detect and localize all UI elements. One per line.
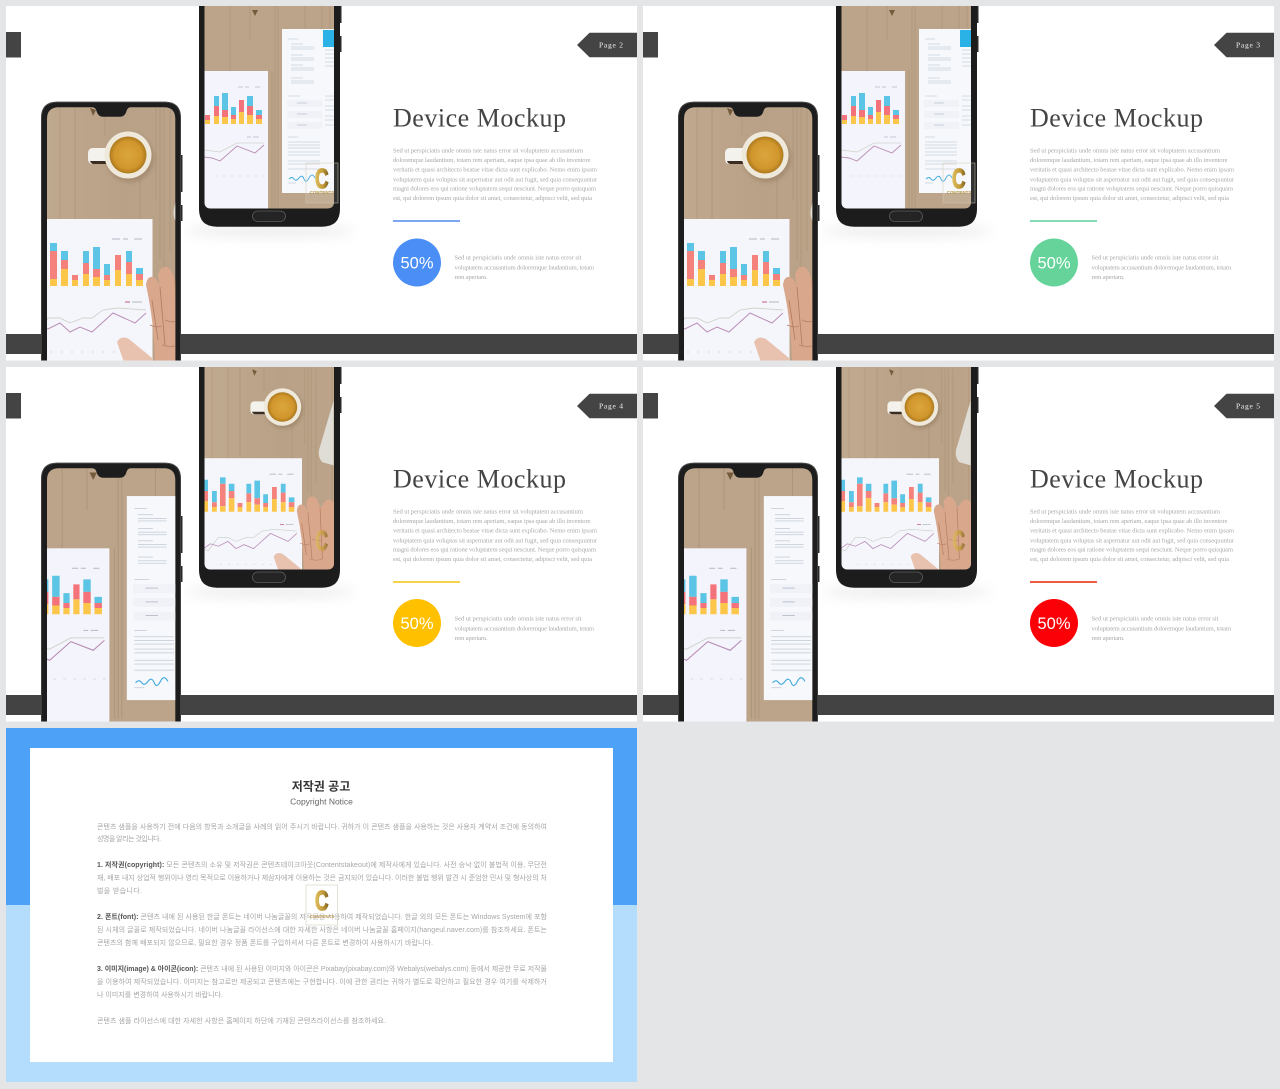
bottom dark bar bbox=[6, 334, 637, 354]
body text: Sed ut perspiciatis unde omnis iste natus error sit voluptatem accusantium bbox=[1030, 147, 1221, 154]
caption text: voluptatem accusantium doloremque laudantium, totam bbox=[454, 264, 595, 271]
page tag: Page 4 bbox=[599, 402, 623, 410]
phone mockup: front, coffee and chart bbox=[678, 102, 820, 360]
body text: magni dolores eos qui ratione voluptatem sequi nesciunt. Neque porro quisquam bbox=[393, 186, 597, 193]
notice subtitle: Copyright Notice bbox=[290, 796, 353, 806]
white notice card bbox=[30, 748, 613, 1062]
watermark bbox=[306, 885, 338, 925]
left dark tab bbox=[6, 32, 21, 58]
body text bbox=[1030, 508, 1235, 563]
blue background top bbox=[6, 728, 637, 905]
intro paragraph: 콘텐츠 샘플을 사용하기 전에 다음의 항목과 소개글을 사례의 읽어 주시기 바랍니다. 귀하가 이 콘텐츠 샘플을 사용하는 것은 사용자 계약서 조건에 동의하여 bbox=[97, 822, 547, 831]
panel: slide page 5 (red) bbox=[637, 355, 1274, 740]
body text: magni dolores eos qui ratione voluptatem sequi nesciunt. Neque porro quisquam bbox=[1030, 186, 1234, 193]
watermark: C bbox=[952, 164, 966, 194]
body text: veritatis et quasi architecto beatae vitae dicta sunt explicabo. Nemo enim ipsam bbox=[393, 528, 598, 535]
phone mockup: front, résumé and chart bbox=[41, 462, 182, 722]
bottom dark bar bbox=[6, 695, 637, 715]
closing line: 콘텐츠 샘플 라이선스에 대한 자세한 사항은 홈페이지 하단에 기재된 콘텐츠라이선스를 참조하세요. bbox=[97, 1016, 386, 1025]
caption text: Sed ut perspiciatis unde omnis iste natus error sit bbox=[1092, 615, 1219, 622]
percent badge: 50% bbox=[1037, 615, 1071, 633]
intro paragraph: 성명을 알리는 것입니다. bbox=[97, 834, 161, 843]
body text: doloremque laudantium, totam rem aperiam, eaque ipsa quae ab illo inventore bbox=[1030, 157, 1228, 164]
watermark: CONTENTS bbox=[310, 190, 334, 195]
body text: magni dolores eos qui ratione voluptatem sequi nesciunt. Neque porro quisquam bbox=[1030, 547, 1234, 554]
caption text: rem aperiam. bbox=[454, 274, 488, 281]
body text: doloremque laudantium, totam rem aperiam, eaque ipsa quae ab illo inventore bbox=[393, 157, 591, 164]
percent badge: 50% bbox=[400, 615, 434, 633]
section 1: copyright: 재, 배포 내지 상업적 행위이나 영리 목적으로 이용하거나 제삼자에게 이용하는 것은 금지되어 있습니다. 이러한 불법 행위 발견 시 준엄한 민사 및 형사상의 처 bbox=[97, 873, 547, 882]
caption text bbox=[454, 254, 595, 281]
watermark: C bbox=[316, 525, 328, 556]
page tag bbox=[577, 33, 637, 57]
percent badge bbox=[393, 238, 441, 286]
heading: Device Mockup bbox=[393, 464, 566, 494]
slide background bbox=[6, 367, 637, 722]
section 3: image and icon: 을 이용하여 제작되었습니다. 이미지는 참고로만 제공되고 콘텐츠에는 구현합니다. 이에 관한 권리는 귀하가 별도로 확인하고 필요한 경우 여기를 삭제하거 bbox=[97, 977, 547, 986]
body text: doloremque laudantium, totam rem aperiam, eaque ipsa quae ab illo inventore bbox=[1030, 518, 1228, 525]
body text: voluptatem quia voluptas sit aspernatur aut odit aut fugit, sed quia consequuntur bbox=[1030, 537, 1235, 544]
light blue background bottom bbox=[6, 905, 637, 1082]
bottom dark bar bbox=[643, 695, 1274, 715]
body text: doloremque laudantium, totam rem aperiam, eaque ipsa quae ab illo inventore bbox=[393, 518, 591, 525]
panel: slide page 3 (green) bbox=[643, 6, 1274, 360]
percent badge bbox=[1030, 599, 1078, 647]
body text: voluptatem quia voluptas sit aspernatur aut odit aut fugit, sed quia consequuntur bbox=[1030, 176, 1235, 183]
section 3: image and icon: 나 이미지를 변경하여 사용하시기 바랍니다. bbox=[97, 990, 223, 999]
caption text: Sed ut perspiciatis unde omnis iste natus error sit bbox=[454, 254, 582, 261]
body text: veritatis et quasi architecto beatae vitae dicta sunt explicabo. Nemo enim ipsam bbox=[1030, 167, 1235, 174]
intro paragraph bbox=[97, 822, 547, 843]
body text: veritatis et quasi architecto beatae vitae dicta sunt explicabo. Nemo enim ipsam bbox=[1030, 528, 1235, 535]
caption text: voluptatem accusantium doloremque laudantium, totam bbox=[1092, 625, 1232, 632]
section 1: copyright: 벌을 받습니다. bbox=[97, 886, 142, 895]
percent badge bbox=[393, 599, 441, 647]
body text: est, qui dolorem ipsum quia dolor sit amet, consectetur, adipisci velit, sed quia bbox=[393, 195, 592, 202]
watermark bbox=[306, 163, 338, 203]
page tag: Page 3 bbox=[1236, 40, 1260, 50]
bottom dark bar bbox=[643, 334, 1274, 354]
body text: Sed ut perspiciatis unde omnis iste natus error sit voluptatem accusantium bbox=[1030, 508, 1221, 515]
section 1: copyright: 1. 저작권(copyright): 모든 콘텐츠의 소유 및 저작권은 콘텐츠테이크아웃(Contentstakeout)에 제작사에게 있습니다. 사전 승낙 없이 불법적 이용, 무단전 bbox=[97, 860, 547, 869]
watermark: CONTENTS bbox=[310, 914, 334, 919]
watermark bbox=[943, 163, 975, 203]
body text bbox=[393, 147, 598, 202]
body text bbox=[393, 508, 598, 563]
phone mockup: front, coffee and chart bbox=[41, 102, 182, 360]
watermark: CONTENTS bbox=[947, 190, 971, 195]
left dark tab bbox=[643, 393, 658, 418]
section 3: image and icon: 3. 이미지(image) & 아이콘(icon): 콘텐츠 내에 된 사용된 이미지와 아이콘은 Pixabay(pixabay.com)와 Webalys(webalys.com) 등에서 제공한 무료 저작물 bbox=[97, 964, 548, 973]
phone mockup: front, résumé and chart bbox=[678, 462, 820, 722]
heading: Device Mockup bbox=[1030, 104, 1203, 132]
page tag bbox=[577, 394, 637, 418]
accent divider bbox=[393, 220, 460, 222]
body text: est, qui dolorem ipsum quia dolor sit amet, consectetur, adipisci velit, sed quia bbox=[1030, 556, 1229, 563]
accent divider bbox=[1030, 220, 1097, 222]
body text: voluptatem quia voluptas sit aspernatur aut odit aut fugit, sed quia consequuntur bbox=[393, 176, 598, 183]
heading: Device Mockup bbox=[393, 104, 566, 132]
page tag: Page 2 bbox=[599, 40, 623, 50]
panel: slide page 2 (blue) bbox=[6, 6, 637, 360]
body text: voluptatem quia voluptas sit aspernatur aut odit aut fugit, sed quia consequuntur bbox=[393, 537, 598, 544]
left dark tab bbox=[6, 393, 21, 418]
body text: magni dolores eos qui ratione voluptatem sequi nesciunt. Neque porro quisquam bbox=[393, 547, 597, 554]
body text: veritatis et quasi architecto beatae vitae dicta sunt explicabo. Nemo enim ipsam bbox=[393, 167, 598, 174]
section 1: copyright bbox=[97, 860, 547, 895]
panel: copyright notice slide bbox=[6, 728, 637, 1082]
body text: Sed ut perspiciatis unde omnis iste natus error sit voluptatem accusantium bbox=[393, 508, 584, 515]
phone mockup: back, coffee and chart bbox=[836, 367, 978, 599]
watermark: C bbox=[952, 525, 965, 556]
left dark tab bbox=[643, 32, 658, 58]
body text bbox=[1030, 147, 1235, 202]
slide background bbox=[6, 6, 637, 360]
caption text: Sed ut perspiciatis unde omnis iste natus error sit bbox=[1092, 254, 1219, 261]
phone mockup: back, coffee and chart bbox=[199, 367, 342, 599]
panel: slide page 4 (yellow) bbox=[0, 355, 637, 740]
percent badge: 50% bbox=[400, 254, 434, 272]
caption text bbox=[1092, 254, 1232, 281]
body text: est, qui dolorem ipsum quia dolor sit amet, consectetur, adipisci velit, sed quia bbox=[393, 556, 592, 563]
section 2: font: 2. 폰트(font): 콘텐츠 내에 된 사용된 한글 폰트는 네이버 나눔글꼴의 저작물을 사용하여 제작되었습니다. 한글 외의 모든 폰트는 Windows System에 포함 bbox=[97, 912, 548, 921]
caption text: rem aperiam. bbox=[1092, 635, 1125, 642]
page tag bbox=[1214, 394, 1274, 418]
slide background bbox=[643, 367, 1274, 722]
watermark: C bbox=[315, 164, 329, 194]
caption text: voluptatem accusantium doloremque laudantium, totam bbox=[454, 625, 595, 632]
page tag bbox=[1214, 33, 1274, 57]
caption text: rem aperiam. bbox=[454, 635, 488, 642]
accent divider bbox=[1030, 581, 1097, 583]
caption text: rem aperiam. bbox=[1092, 274, 1125, 281]
caption text: voluptatem accusantium doloremque laudantium, totam bbox=[1092, 264, 1232, 271]
notice title: 저작권 공고 bbox=[292, 778, 350, 794]
slide background bbox=[643, 6, 1274, 360]
body text: est, qui dolorem ipsum quia dolor sit amet, consectetur, adipisci velit, sed quia bbox=[1030, 195, 1229, 202]
caption text bbox=[1092, 615, 1232, 642]
section 2: font bbox=[97, 912, 548, 947]
watermark: C bbox=[315, 886, 329, 916]
percent badge: 50% bbox=[1037, 254, 1071, 272]
caption text bbox=[454, 615, 595, 642]
section 3: image and icon bbox=[97, 964, 548, 999]
page tag: Page 5 bbox=[1236, 402, 1260, 410]
accent divider bbox=[393, 581, 460, 583]
section 2: font: 된 시체의 글꼴로 제작되었습니다. 네이버 나눔글꼴 라이선스에 대한 자세한 사항은 네이버 나눔글꼴 홈페이지(hangeul.naver.com)를 참조하세요. 폰트는 bbox=[97, 925, 548, 934]
percent badge bbox=[1030, 238, 1078, 286]
phone mockup: back, résumé and chart bbox=[836, 6, 978, 238]
phone mockup: back, résumé and chart bbox=[199, 6, 342, 238]
caption text: Sed ut perspiciatis unde omnis iste natus error sit bbox=[454, 615, 582, 622]
section 2: font: 콘텐츠의 함께 배포되지 않으므로, 필요한 경우 정품 폰트를 구입하셔서 다른 폰트로 변경하여 사용하시기 바랍니다. bbox=[97, 938, 433, 947]
body text: Sed ut perspiciatis unde omnis iste natus error sit voluptatem accusantium bbox=[393, 147, 584, 154]
heading: Device Mockup bbox=[1030, 464, 1203, 494]
